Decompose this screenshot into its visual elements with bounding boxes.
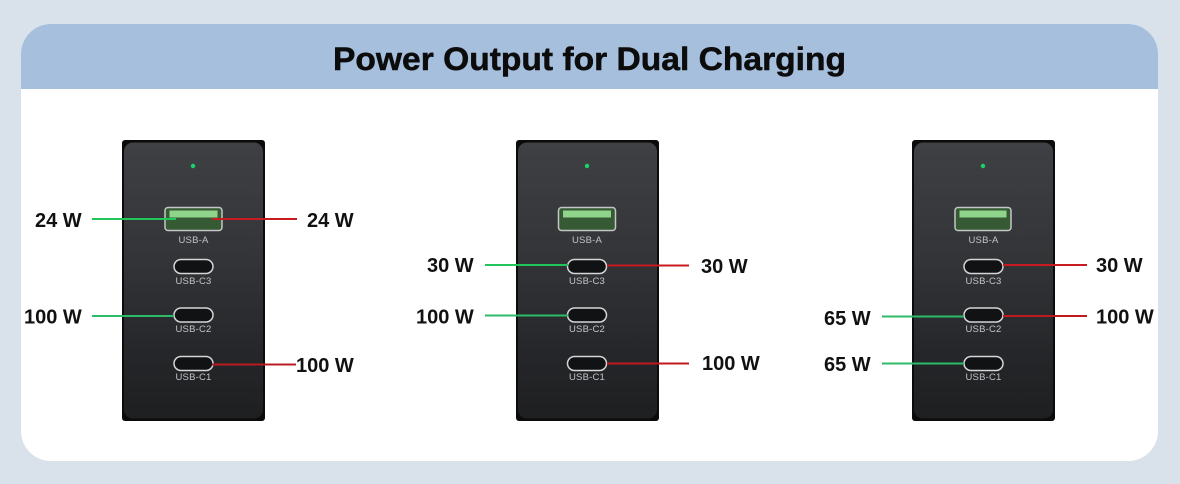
port: USB-C3: USB-C3 (569, 276, 605, 287)
panel: title band (21, 24, 1158, 89)
port: USB-C1: USB-C1 (569, 372, 605, 383)
port: USB-C3 (568, 260, 606, 287)
connector: red USB-A (212, 218, 297, 220)
connector: red USB-C1 (212, 364, 296, 366)
connector: green USB-C3 (485, 264, 568, 266)
label: 100 W right: 100 W (702, 353, 760, 375)
port: USB-C1 (964, 356, 1003, 383)
label: 30 W right: 30 W (701, 256, 748, 278)
port: USB-C3 (964, 260, 1003, 287)
port: USB-C1 (568, 356, 606, 383)
port: USB-C1: USB-C1 (175, 372, 212, 383)
label: 30 W left: 30 W (427, 255, 474, 277)
label: 65 W left: 65 W (824, 308, 871, 330)
status LED (191, 164, 195, 168)
label: 30 W right: 30 W (1096, 255, 1143, 277)
port: USB-C2: USB-C2 (175, 324, 212, 335)
port: USB-C2 (568, 308, 606, 335)
label: 65 W lower left: 65 W (824, 354, 871, 376)
label: 100 W left: 100 W (24, 306, 82, 328)
label: 24 W left: 24 W (35, 210, 82, 232)
title: Power Output for Dual Charging (333, 41, 846, 77)
status LED (585, 164, 589, 168)
port: USB-C1 (174, 356, 213, 383)
port: USB-C2: USB-C2 (569, 324, 605, 335)
port: USB-A (165, 208, 222, 246)
port: USB-C3 (174, 260, 213, 287)
connector: green USB-C2 (485, 314, 568, 316)
connector: red USB-C1 (607, 362, 689, 364)
port: USB-A (558, 208, 616, 246)
charger body (912, 140, 1055, 421)
port: USB-C2 (174, 308, 213, 335)
connector: green USB-A (92, 218, 176, 220)
connector: red USB-C3 (1003, 264, 1087, 266)
connector: red USB-C3 (607, 264, 689, 266)
charger 2 (416, 140, 760, 421)
label: 24 W right: 24 W (307, 210, 354, 232)
port: USB-A: USB-A (572, 235, 602, 246)
label: 100 W right: 100 W (1096, 306, 1154, 328)
charger 3 (824, 140, 1154, 421)
label: 100 W left: 100 W (416, 306, 474, 328)
port: USB-C3: USB-C3 (965, 276, 1002, 287)
port: USB-A (955, 208, 1011, 246)
label: 100 W right: 100 W (296, 355, 354, 377)
port: USB-C2: USB-C2 (965, 324, 1002, 335)
port: USB-C3: USB-C3 (175, 276, 212, 287)
connector: green USB-C1 (882, 362, 964, 364)
connector: green USB-C2 (92, 315, 174, 317)
connector: red USB-C2 (1003, 315, 1087, 317)
port: USB-C1: USB-C1 (965, 372, 1002, 383)
charger 1 (24, 140, 354, 421)
status LED (981, 164, 985, 168)
connector: green USB-C2 (882, 316, 964, 318)
charger body (122, 140, 265, 421)
port: USB-C2 (964, 308, 1003, 335)
charger body (516, 140, 659, 421)
port: USB-A: USB-A (178, 235, 209, 246)
port: USB-A: USB-A (968, 235, 999, 246)
